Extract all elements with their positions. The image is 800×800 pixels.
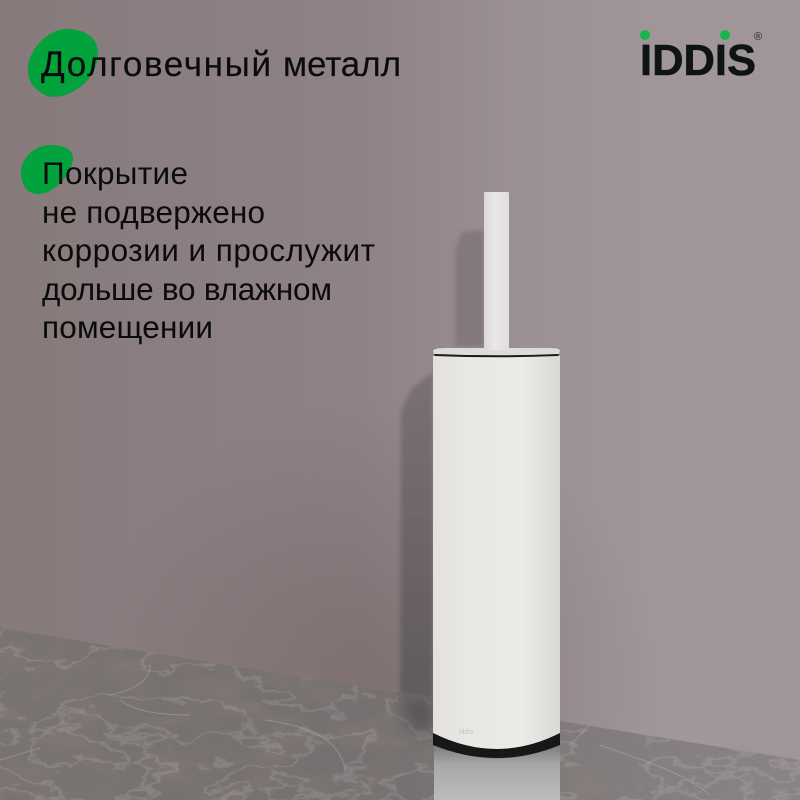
title (41, 45, 401, 84)
title: Долговечный (41, 45, 271, 84)
toilet brush holder (433, 192, 560, 758)
cylinder body (433, 356, 560, 749)
green blob behind title (28, 29, 98, 97)
black base ring (433, 733, 560, 758)
logo: IDDIS: IDDIS (640, 36, 756, 85)
lid (433, 348, 560, 356)
description text: дольше во влажном (42, 271, 332, 307)
shadow of brush body on wall (400, 372, 433, 699)
description text (42, 155, 375, 345)
shadow of handle on wall (455, 230, 484, 347)
registered mark: ® (754, 31, 762, 43)
handle foot over lid (484, 340, 509, 350)
green blob behind description (21, 145, 73, 194)
floor shadow beside holder (402, 693, 433, 738)
floor reflection of brush (434, 745, 560, 800)
title: металл (283, 45, 401, 84)
description text: помещении (42, 309, 213, 345)
logo dots (640, 30, 650, 40)
small engraved brand mark: iddis (459, 729, 474, 736)
description text: не подвержено (42, 194, 265, 230)
marble floor (0, 620, 800, 800)
lid black gap line (434, 354, 559, 357)
handle (484, 192, 509, 350)
description text: Покрытие (42, 155, 188, 191)
description text: коррозии и прослужит (42, 232, 375, 268)
